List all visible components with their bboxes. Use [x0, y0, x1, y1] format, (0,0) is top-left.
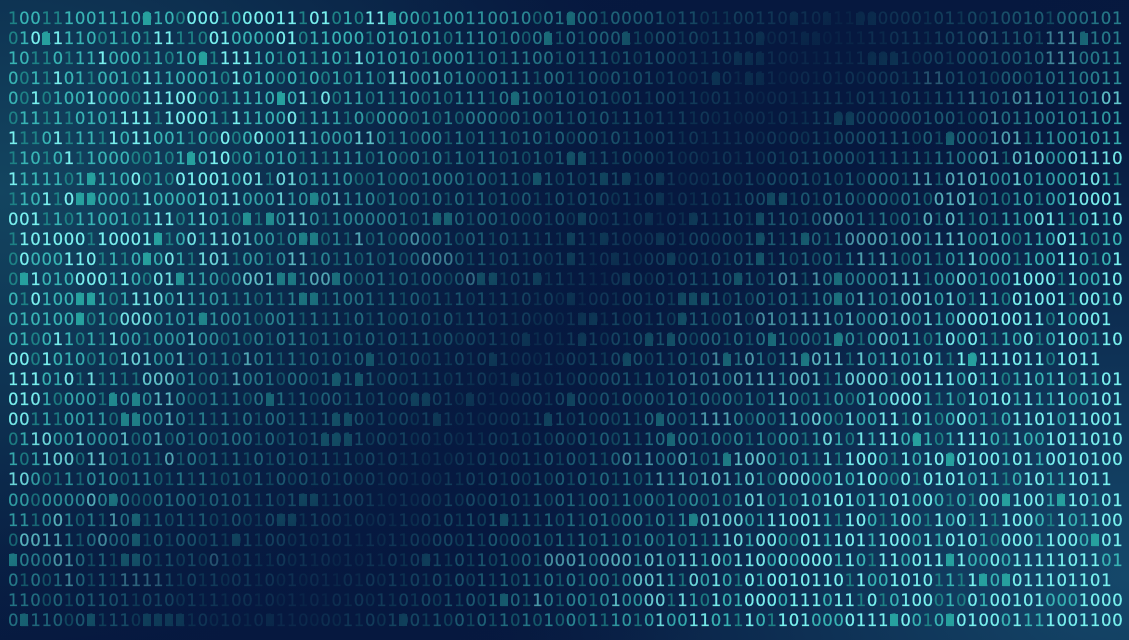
binary code field: 100011101001101111101011000101000100100110101001001010110111101011010000001010000101010111010111011: [8, 470, 1112, 489]
binary code field: 010011011111111101100110010011010011010100111011010100100011100101010010110110010101111101011101101: [8, 571, 1112, 590]
binary code field: 11101111110110011000000001110001101100011011101010000101100110111100000011000011100100001011110010110: [8, 129, 1122, 148]
binary code field: 0011100110110010111110100111111001000111010000111101000110100111100001100001001110100001101101011001: [8, 410, 1122, 429]
binary code field: 0111110101111110001111100011111000000101000000100110101110111100100010111100000000100100101100101101: [8, 109, 1122, 128]
binary code field: 0101000011010110001110011110001101000001010100001010001000010100001011001100010000111010101111100101: [8, 390, 1122, 409]
binary code field: 00011110000110100011011000101011101100000110000101110110100101111010000011101110001101010000110001011: [8, 531, 1122, 550]
binary code field: 110101110000010110100010101111110100010110110101010111100001000101100101100001111111100011010000111010: [8, 149, 1122, 168]
binary code field: 00010100101010011011010111101010110100110101100010001100001101011101011001111011010111011101101011: [8, 350, 1101, 369]
binary code field: 010100101000001010100100011111101100101011101100001101100110011001001011110100010011000010011010001: [8, 310, 1112, 329]
binary code field: 1110101111110000100110010000101110001110110011010100000111010101001111001110000100111001101101101101: [8, 370, 1122, 389]
binary code field: 1000010111110110100101110011001011010011011010010001000010101110011000000011011100111100001111101101: [8, 551, 1122, 570]
binary code field: 010011011100100010001001011011010101110000011011011010010011000010101100010010001101000111001010011001: [8, 330, 1122, 349]
binary code field: 0110100001100011110000011110010001101000001010101111110100010111001010111010000111100001001000110010: [8, 270, 1122, 289]
binary code field: 0111000111101111100101011100001100100110010110101000111010100110111011010000111100101010001111001100: [8, 611, 1122, 630]
binary code field: 00111011001011101101011101101100000101010100100010010011011010111011110100001110010101101110011101101: [8, 210, 1122, 229]
binary code field: 1101000110001110011101001001011101000001001101111111101000001000001011100110000100111100100110011010: [8, 230, 1122, 249]
binary code field: 110110100001100001011000110001110010010101101001101010011011011011001010101000000100101010101001000100: [8, 190, 1122, 209]
binary code field: 11100101110011011101001000110010001100101101011110110100010110010001110011110011001100111100011011001: [8, 511, 1122, 530]
binary code field: 1011000110101101001111010101111001011010010100110100110011000101110001011111000110100010010110010100: [8, 450, 1122, 469]
binary code field: 000001101110100111011001011101101010000001110110011110110000001010111101001111110011011000110011010110: [8, 250, 1122, 269]
binary code field: 00000000000000100101011101111100110100010000101100110011000100010101010101010110100010100110011101011: [8, 490, 1122, 510]
binary code field: 00101001000011100001111010110011011100101111001001010100110011001100001111110111011111110101101101011: [8, 89, 1122, 108]
binary code field: 01100010001001001001001001011011000100100110010100001001110100100011000110101111001011110110010110101: [8, 430, 1122, 449]
binary code field: 1100010110110100111100100110101001101001100110110100101000011101010000111011101010001001001010001000: [8, 591, 1122, 610]
